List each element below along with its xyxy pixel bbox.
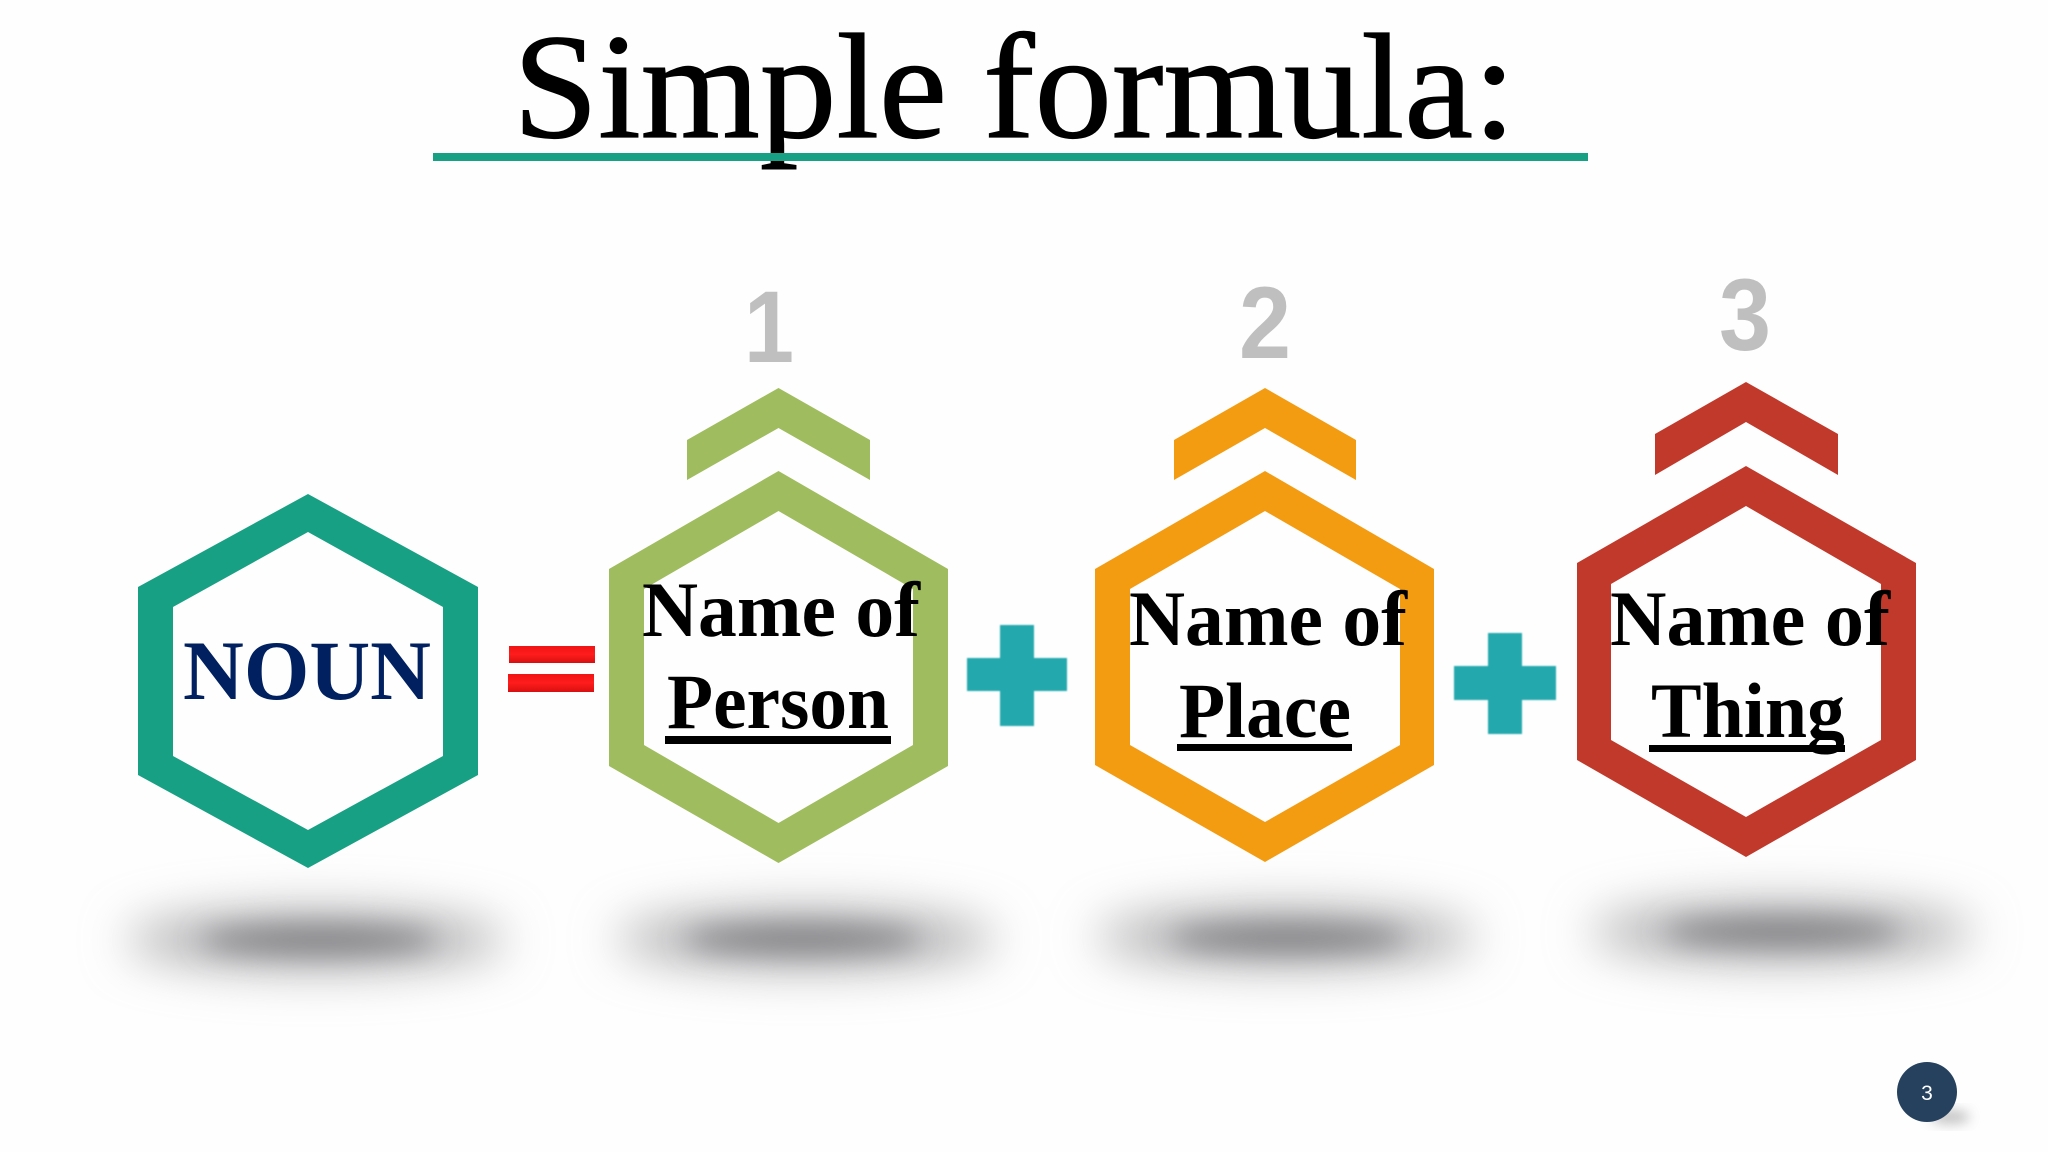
hexagon green: [609, 471, 948, 863]
hexagon: noun: [138, 494, 478, 868]
underline place: [1177, 744, 1352, 751]
number 3: 3: [1719, 258, 1771, 372]
chevron green: [687, 388, 870, 480]
underline person: [665, 736, 891, 744]
equals sign: [508, 646, 595, 692]
label name of: Name of: [1610, 575, 1891, 662]
hexagon orange: [1095, 471, 1434, 862]
column 2: name of place: [1095, 266, 1434, 862]
underline thing: [1649, 745, 1845, 752]
title: [513, 4, 1516, 170]
page number badge: 3: [1921, 1082, 1933, 1105]
chevron orange: [1174, 388, 1356, 480]
number 2: 2: [1239, 266, 1291, 380]
plus sign 1: [967, 625, 1067, 726]
column 3: name of thing: [1577, 258, 1916, 857]
title: formula:: [983, 4, 1516, 170]
floor shadows: [126, 902, 1974, 970]
hexagon red: [1577, 466, 1916, 857]
noun label: NOUN: [183, 624, 431, 718]
label name of: Name of: [642, 566, 921, 653]
label thing: Thing: [1651, 667, 1845, 754]
plus sign 2: [1454, 633, 1556, 734]
title: Simple: [513, 4, 947, 170]
label place: Place: [1179, 667, 1351, 754]
title underline: [433, 153, 1588, 161]
number 1: 1: [744, 270, 794, 384]
chevron red: [1655, 382, 1838, 475]
label person: Person: [667, 658, 889, 745]
column 1: name of person: [609, 270, 948, 863]
label name of: Name of: [1129, 575, 1408, 662]
page number badge: [1897, 1062, 1970, 1124]
